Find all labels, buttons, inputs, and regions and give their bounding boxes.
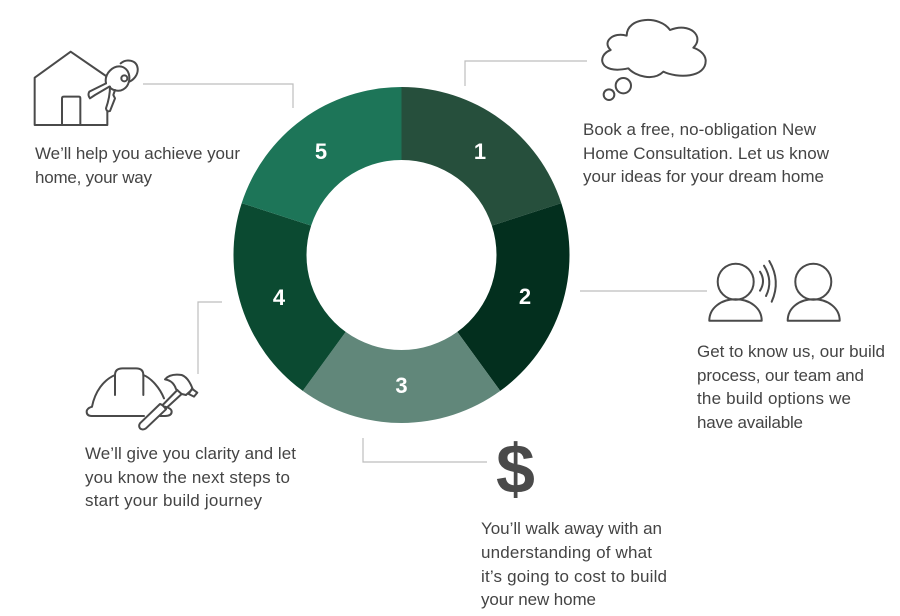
text: step 3: understanding of what: [481, 543, 652, 562]
segment 2: 2: [519, 284, 531, 309]
text: step 3: your new home: [481, 590, 596, 609]
icon: two people talking: [709, 261, 840, 321]
text: step 4: We’ll give you clarity and let: [85, 444, 296, 463]
text: step 1: Home Consultation. Let us know: [583, 144, 830, 163]
segment 1: [402, 87, 561, 226]
text: step 4: you know the next steps to: [85, 468, 290, 487]
segment 1: 1: [474, 139, 486, 164]
text: step 3: You’ll walk away with an: [481, 519, 662, 538]
text: step 1: your ideas for your dream home: [583, 167, 824, 186]
text: step 2: Get to know us, our build: [697, 342, 885, 361]
donut chart: [233, 87, 570, 423]
icon: dollar sign: $: [496, 430, 535, 508]
segment 5: [242, 87, 402, 226]
text: step 4: start your build journey: [85, 491, 262, 510]
text: step 2: process, our team and: [697, 366, 864, 385]
icon: hard hat and hammer: [87, 368, 197, 429]
text: step 2: have available: [697, 413, 803, 432]
segment 4: 4: [273, 285, 286, 310]
segment 3: [303, 332, 500, 423]
text: step 5: home, your way: [35, 168, 152, 187]
icon: thought cloud: [602, 20, 706, 100]
text: step 3: it’s going to cost to build: [481, 567, 667, 586]
segment 3: 3: [395, 373, 408, 398]
icon: house and keys: [35, 52, 138, 125]
segment 4: [233, 203, 346, 391]
text: step 1: Book a free, no-obligation New: [583, 120, 817, 139]
text: step 2: the build options we: [697, 389, 851, 408]
text: step 5: We’ll help you achieve your: [35, 144, 240, 163]
segment 5: 5: [315, 139, 327, 164]
segment 2: [457, 203, 570, 391]
